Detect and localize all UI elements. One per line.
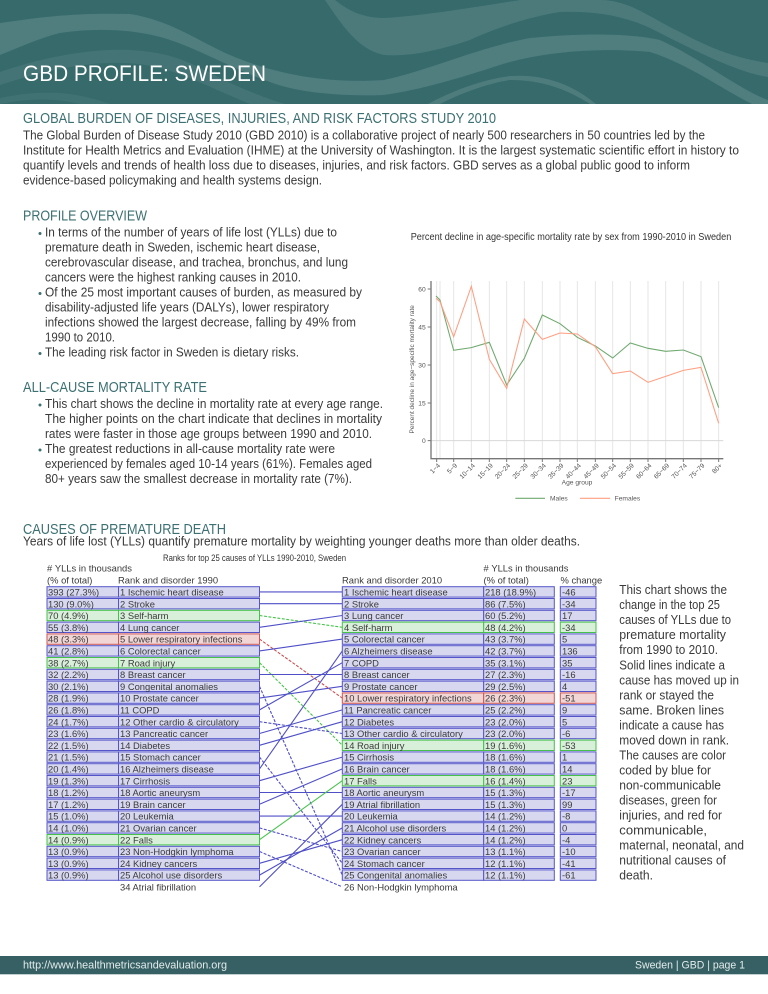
x axis labels: 50−54 — [600, 462, 618, 481]
table: 2010 ranks: 136 — [562, 646, 578, 657]
text block: all-cause mortality bullets: The greatest reductions in all-cause mortality rate were — [45, 441, 335, 456]
table: 1990 ranks: 11 COPD — [120, 705, 160, 716]
table: 1990 ranks: 14 (1.0%) — [48, 823, 89, 834]
x axis title: Age group — [562, 480, 593, 487]
table: 1990 ranks: 24 Kidney cancers — [120, 858, 197, 869]
table: 2010 ranks: 20 Leukemia — [344, 811, 398, 822]
table: 1990 ranks: 55 (3.8%) — [48, 622, 89, 633]
table: 1990 ranks: 10 Prostate cancer — [120, 693, 199, 704]
table: 2010 ranks: 23 (2.0%) — [485, 728, 526, 739]
table: 2010 ranks: 18 (1.6%) — [485, 764, 526, 775]
x axis labels: 40−44 — [565, 462, 583, 481]
table: 2010 ranks: 23 — [562, 775, 572, 786]
table: 2010 ranks: 23 (2.0%) — [485, 716, 526, 727]
text block: chart explanation: rank or stayed the — [619, 688, 714, 702]
chart title: percent decline: Percent decline in age-specific mortality rate by sex from 1990-2010 in Sweden — [411, 232, 731, 243]
table: 2010 ranks: 29 (2.5%) — [485, 681, 526, 692]
legend: Females — [615, 496, 641, 503]
table: 2010 ranks: 3 Lung cancer — [344, 610, 403, 621]
text block: chart explanation: causes of YLLs due to — [619, 613, 731, 627]
table: 2010 ranks: 1 — [562, 752, 567, 763]
table: 2010 ranks: 23 Ovarian cancer — [344, 846, 421, 857]
table: 1990 ranks: 19 Brain cancer — [120, 799, 186, 810]
legend — [515, 496, 641, 503]
text block: profile overview bullets: 1990 to 2010. — [45, 330, 115, 345]
table: 2010 ranks: 42 (3.7%) — [485, 646, 526, 657]
x axis labels: 25−29 — [512, 462, 530, 481]
text block: profile overview bullets: premature death in Sweden, ischemic heart disease, — [45, 240, 320, 255]
table: 1990 ranks: 22 Falls — [120, 834, 153, 845]
heading: profile overview: PROFILE OVERVIEW — [23, 208, 148, 225]
table: 2010 ranks: 218 (18.9%) — [485, 587, 536, 598]
table: 1990 ranks: 2 Stroke — [120, 598, 155, 609]
x axis labels: 45−49 — [583, 462, 601, 481]
series: females — [436, 286, 719, 423]
y axis labels: 30 — [418, 362, 426, 369]
table: 2010 ranks: 43 (3.7%) — [485, 634, 526, 645]
y axis labels: 45 — [418, 324, 426, 331]
table: 1990 ranks: 13 (0.9%) — [48, 846, 89, 857]
x axis labels: 1−4 — [429, 462, 442, 475]
table: 2010 ranks: 60 (5.2%) — [485, 610, 526, 621]
table: 2010 ranks: 12 Diabetes — [344, 716, 394, 727]
table: 1990 ranks: 24 (1.7%) — [48, 716, 89, 727]
table: 2010 ranks: 17 Falls — [344, 775, 377, 786]
text block: chart explanation: injuries, and red for — [619, 808, 722, 822]
x axis labels — [429, 462, 724, 481]
heading: study: GLOBAL BURDEN OF DISEASES, INJURIES, AND RISK FACTORS STUDY 2010 — [23, 110, 496, 127]
table: 2010 ranks: 25 (2.2%) — [485, 705, 526, 716]
table: 2010 ranks: -34 — [562, 598, 576, 609]
x axis labels: 80+ — [711, 462, 724, 475]
table: 2010 ranks: 11 Pancreatic cancer — [344, 705, 431, 716]
table: 2010 ranks: 19 Atrial fibrillation — [344, 799, 420, 810]
table: 1990 ranks: 25 Alcohol use disorders — [120, 870, 222, 881]
y axis labels — [418, 286, 426, 445]
table: 2010 ranks: 4 Self-harm — [344, 622, 393, 633]
text block: chart explanation: diseases, green for — [619, 793, 717, 807]
table: 2010 ranks: 15 (1.3%) — [485, 787, 526, 798]
table: 2010 ranks: 35 — [562, 657, 572, 668]
series: males — [436, 296, 719, 408]
table: 1990 ranks: 6 Colorectal cancer — [120, 646, 201, 657]
table: 2010 ranks: 0 — [562, 823, 567, 834]
table: 1990 ranks: 13 Pancreatic cancer — [120, 728, 208, 739]
heading: all-cause mortality rate: ALL-CAUSE MORTALITY RATE — [23, 379, 207, 396]
table: 2010 ranks — [342, 586, 596, 892]
text block: causes intro: Years of life lost (YLLs) quantify premature mortality by weighting younger deaths more than older deaths. — [23, 534, 580, 548]
table: 1990 ranks: 41 (2.8%) — [48, 646, 89, 657]
table: 2010 ranks: 7 COPD — [344, 657, 379, 668]
text block: chart explanation — [619, 583, 744, 882]
x axis labels: 75−79 — [688, 462, 707, 481]
text block: all-cause mortality bullets: The higher points on the chart indicate that declines in mortality — [45, 411, 382, 426]
y axis labels: 60 — [418, 286, 426, 293]
table headers: Rank and disorder 2010 — [342, 574, 442, 586]
table title: Ranks for top 25 causes of YLLs 1990-2010, Sweden — [163, 553, 346, 563]
table: 2010 ranks: 27 (2.3%) — [485, 669, 526, 680]
table: 1990 ranks: 70 (4.9%) — [48, 610, 89, 621]
table: 1990 ranks: 30 (2.1%) — [48, 681, 89, 692]
table: 2010 ranks: 26 (2.3%) — [485, 693, 526, 704]
x axis labels: 60−64 — [635, 462, 654, 481]
page title: GBD PROFILE: SWEDEN — [23, 61, 266, 86]
table: 2010 ranks: 18 (1.6%) — [485, 752, 526, 763]
text block: chart explanation: premature mortality — [619, 628, 727, 642]
table: 2010 ranks: 17 — [562, 610, 572, 621]
table: 1990 ranks: 8 Breast cancer — [120, 669, 186, 680]
text block: chart explanation: Solid lines indicate a — [619, 658, 725, 672]
x axis labels: 65−69 — [653, 462, 671, 481]
table headers: % change — [560, 574, 602, 586]
text block: profile overview bullets: disability-adjusted life years (DALYs), lower respiratory — [45, 300, 329, 315]
text block: chart explanation: communicable, — [619, 823, 707, 837]
table: 2010 ranks: 13 Other cardio & circulatory — [344, 728, 463, 739]
table: 2010 ranks: 9 Prostate cancer — [344, 681, 417, 692]
table: 2010 ranks: 8 Breast cancer — [344, 669, 410, 680]
table: 2010 ranks: -4 — [562, 834, 570, 845]
table: 2010 ranks: 4 — [562, 681, 567, 692]
table: 2010 ranks: 99 — [562, 799, 572, 810]
y axis title: Percent decline in age−specific mortality rate — [409, 305, 416, 433]
table: 2010 ranks: -34 — [562, 622, 576, 633]
table: 1990 ranks: 23 Non-Hodgkin lymphoma — [120, 846, 234, 857]
line chart: percent decline by age group — [409, 281, 724, 503]
table: 2010 ranks: 16 (1.4%) — [485, 775, 526, 786]
table: 1990 ranks: 34 Atrial fibrillation — [120, 882, 196, 892]
table: 1990 ranks: 13 (0.9%) — [48, 858, 89, 869]
table: 2010 ranks: 25 Congenital anomalies — [344, 870, 448, 881]
table headers: # YLLs in thousands — [484, 562, 569, 574]
x axis labels: 55−59 — [618, 462, 636, 481]
text block: all-cause mortality bullets — [38, 396, 383, 486]
footer bar — [0, 956, 768, 974]
table: 2010 ranks: 5 Colorectal cancer — [344, 634, 425, 645]
table: 1990 ranks: 3 Self-harm — [120, 610, 169, 621]
table: 2010 ranks: 5 — [562, 716, 567, 727]
text block: profile overview bullets: The leading risk factor in Sweden is dietary risks. — [45, 345, 299, 360]
text block: all-cause mortality bullets: 80+ years saw the smallest decrease in mortality rate (7%). — [45, 471, 352, 486]
table: 1990 ranks: 48 (3.3%) — [48, 634, 89, 645]
table: 2010 ranks: 12 (1.1%) — [485, 870, 526, 881]
x axis labels: 5−9 — [446, 462, 459, 475]
table: 2010 ranks: 14 (1.2%) — [485, 834, 526, 845]
text block: all-cause mortality bullets: This chart shows the decline in mortality rate at every age range. — [45, 396, 383, 411]
table: 1990 ranks: 393 (27.3%) — [48, 587, 99, 598]
text block: chart explanation: nutritional causes of — [619, 853, 726, 867]
legend: Males — [550, 496, 568, 503]
table: 1990 ranks: 21 (1.5%) — [48, 752, 89, 763]
table: 2010 ranks: 14 — [562, 764, 572, 775]
text block: chart explanation: This chart shows the — [619, 583, 727, 597]
text block: chart explanation: cause has moved up in — [619, 673, 739, 687]
table headers: (% of total) — [484, 574, 529, 586]
table: 1990 ranks: 16 Alzheimers disease — [120, 764, 214, 775]
table: 2010 ranks: 86 (7.5%) — [485, 598, 526, 609]
table: 1990 ranks: 17 Cirrhosis — [120, 775, 170, 786]
table: 2010 ranks: 2 Stroke — [344, 598, 379, 609]
table: 1990 ranks: 26 (1.8%) — [48, 705, 89, 716]
table: 1990 ranks: 1 Ischemic heart disease — [120, 587, 224, 598]
text block: chart explanation: death. — [619, 868, 653, 882]
text block: profile overview bullets — [38, 225, 362, 360]
table: 1990 ranks: 130 (9.0%) — [48, 598, 94, 609]
table: 2010 ranks: 24 Stomach cancer — [344, 858, 425, 869]
table: 2010 ranks: 5 — [562, 634, 567, 645]
table: 2010 ranks: 10 Lower respiratory infections — [344, 693, 472, 704]
table: 2010 ranks: 18 Aortic aneurysm — [344, 787, 424, 798]
table: 2010 ranks: 14 (1.2%) — [485, 811, 526, 822]
table: 2010 ranks: -10 — [562, 846, 576, 857]
table: 2010 ranks: -8 — [562, 811, 570, 822]
table: 1990 ranks — [47, 586, 260, 892]
table: 1990 ranks: 15 Stomach cancer — [120, 752, 201, 763]
table: 2010 ranks: 21 Alcohol use disorders — [344, 823, 446, 834]
text block: profile overview bullets: infections showed the largest decrease, falling by 49% from — [45, 315, 356, 330]
table: 2010 ranks: 35 (3.1%) — [485, 657, 526, 668]
text block: study intro: The Global Burden of Disease Study 2010 (GBD 2010) is a collaborative project of nearly 500 researchers in 50 countries led by the — [23, 128, 705, 142]
x axis labels: 30−34 — [530, 462, 548, 481]
table: 1990 ranks: 9 Congenital anomalies — [120, 681, 218, 692]
table: 1990 ranks: 28 (1.9%) — [48, 693, 89, 704]
table: 2010 ranks: 6 Alzheimers disease — [344, 646, 433, 657]
text block: study intro: Institute for Health Metrics and Evaluation (IHME) at the University of Washington. It is the largest systematic scientific effort in history to — [23, 144, 739, 158]
x axis labels: 20−24 — [494, 462, 512, 481]
table: 2010 ranks: -6 — [562, 728, 570, 739]
footer url: http://www.healthmetricsandevaluation.org — [23, 960, 227, 972]
table headers: # YLLs in thousands — [47, 562, 132, 574]
text block: chart explanation: indicate a cause has — [619, 718, 724, 732]
table: 2010 ranks: -41 — [562, 858, 576, 869]
table: 1990 ranks: 38 (2.7%) — [48, 657, 89, 668]
table: 1990 ranks: 17 (1.2%) — [48, 799, 89, 810]
text block: all-cause mortality bullets: experienced by females aged 10-14 years (61%). Females aged — [45, 456, 372, 471]
text block: study intro: quantify levels and trends of health loss due to diseases, injuries, and risk factors. GBD serves as a global public good to inform — [23, 158, 690, 172]
text block: profile overview bullets: In terms of the number of years of life lost (YLLs) due to — [45, 225, 337, 240]
table: 1990 ranks: 18 (1.2%) — [48, 787, 89, 798]
table: 2010 ranks: -53 — [562, 740, 576, 751]
text block: study intro: evidence-based policymaking and health systems design. — [23, 174, 322, 188]
y axis labels: 0 — [422, 438, 426, 445]
table: 2010 ranks: 48 (4.2%) — [485, 622, 526, 633]
table: 1990 ranks: 21 Ovarian cancer — [120, 823, 197, 834]
table: 1990 ranks: 23 (1.6%) — [48, 728, 89, 739]
table: 1990 ranks: 13 (0.9%) — [48, 870, 89, 881]
text block: chart explanation: from 1990 to 2010. — [619, 643, 718, 657]
table: 2010 ranks: 19 (1.6%) — [485, 740, 526, 751]
x axis labels: 15−19 — [477, 462, 495, 481]
text block: profile overview bullets: cancers were the highest ranking causes in 2010. — [45, 270, 301, 285]
text block: chart explanation: non-communicable — [619, 778, 721, 792]
text block: chart explanation: maternal, neonatal, and — [619, 838, 744, 852]
y axis labels: 15 — [418, 400, 426, 407]
table: 2010 ranks: -16 — [562, 669, 576, 680]
table: 1990 ranks: 4 Lung cancer — [120, 622, 179, 633]
table: 1990 ranks: 20 Leukemia — [120, 811, 174, 822]
x axis labels: 70−74 — [671, 462, 689, 481]
x axis labels: 10−14 — [459, 462, 477, 481]
table: 1990 ranks: 18 Aortic aneurysm — [120, 787, 200, 798]
table: 2010 ranks: -17 — [562, 787, 576, 798]
table: 1990 ranks: 5 Lower respiratory infections — [120, 634, 243, 645]
table: 2010 ranks: 1 Ischemic heart disease — [344, 587, 448, 598]
table headers — [47, 562, 602, 586]
x axis labels: 35−39 — [547, 462, 566, 481]
table: 1990 ranks: 15 (1.0%) — [48, 811, 89, 822]
table: 2010 ranks: 9 — [562, 705, 567, 716]
table: 1990 ranks: 20 (1.4%) — [48, 764, 89, 775]
header banner — [0, 0, 768, 104]
text block: chart explanation: coded by blue for — [619, 763, 711, 777]
table: 2010 ranks: 22 Kidney cancers — [344, 834, 421, 845]
table: 1990 ranks: 12 Other cardio & circulatory — [120, 716, 239, 727]
table: 2010 ranks: 16 Brain cancer — [344, 764, 410, 775]
table: 2010 ranks: 26 Non-Hodgkin lymphoma — [344, 882, 458, 892]
text block: chart explanation: The causes are color — [619, 748, 726, 762]
text block: chart explanation: change in the top 25 — [619, 598, 720, 612]
text block: profile overview bullets: cerebrovascular disease, and trachea, bronchus, and lung — [45, 255, 348, 270]
heading: causes of premature death: CAUSES OF PREMATURE DEATH — [23, 521, 226, 538]
table: 1990 ranks: 7 Road injury — [120, 657, 176, 668]
table: 2010 ranks: 14 (1.2%) — [485, 823, 526, 834]
text block: chart explanation: same. Broken lines — [619, 703, 724, 717]
table: 1990 ranks: 14 (0.9%) — [48, 834, 89, 845]
table: 2010 ranks: -61 — [562, 870, 576, 881]
text block: all-cause mortality bullets: rates were faster in those age groups between 1990 and 2010. — [45, 426, 372, 441]
table: 2010 ranks: 12 (1.1%) — [485, 858, 526, 869]
table: 1990 ranks: 14 Diabetes — [120, 740, 170, 751]
table: 1990 ranks: 32 (2.2%) — [48, 669, 89, 680]
table: 1990 ranks: 22 (1.5%) — [48, 740, 89, 751]
table headers: Rank and disorder 1990 — [118, 574, 218, 586]
table headers: (% of total) — [47, 574, 92, 586]
table: 2010 ranks: 15 (1.3%) — [485, 799, 526, 810]
table: 1990 ranks: 19 (1.3%) — [48, 775, 89, 786]
text block: profile overview bullets: Of the 25 most important causes of burden, as measured by — [45, 285, 362, 300]
table: 2010 ranks: -46 — [562, 587, 576, 598]
table: 2010 ranks: -51 — [562, 693, 576, 704]
table: 2010 ranks: 14 Road injury — [344, 740, 405, 751]
text block: study intro — [23, 128, 739, 188]
footer page label: Sweden | GBD | page 1 — [635, 960, 745, 972]
text block: chart explanation: moved down in rank. — [619, 733, 729, 747]
table: 2010 ranks: 13 (1.1%) — [485, 846, 526, 857]
table: 2010 ranks: 15 Cirrhosis — [344, 752, 394, 763]
connector lines between 1990 and 2010 ranks — [260, 592, 342, 887]
